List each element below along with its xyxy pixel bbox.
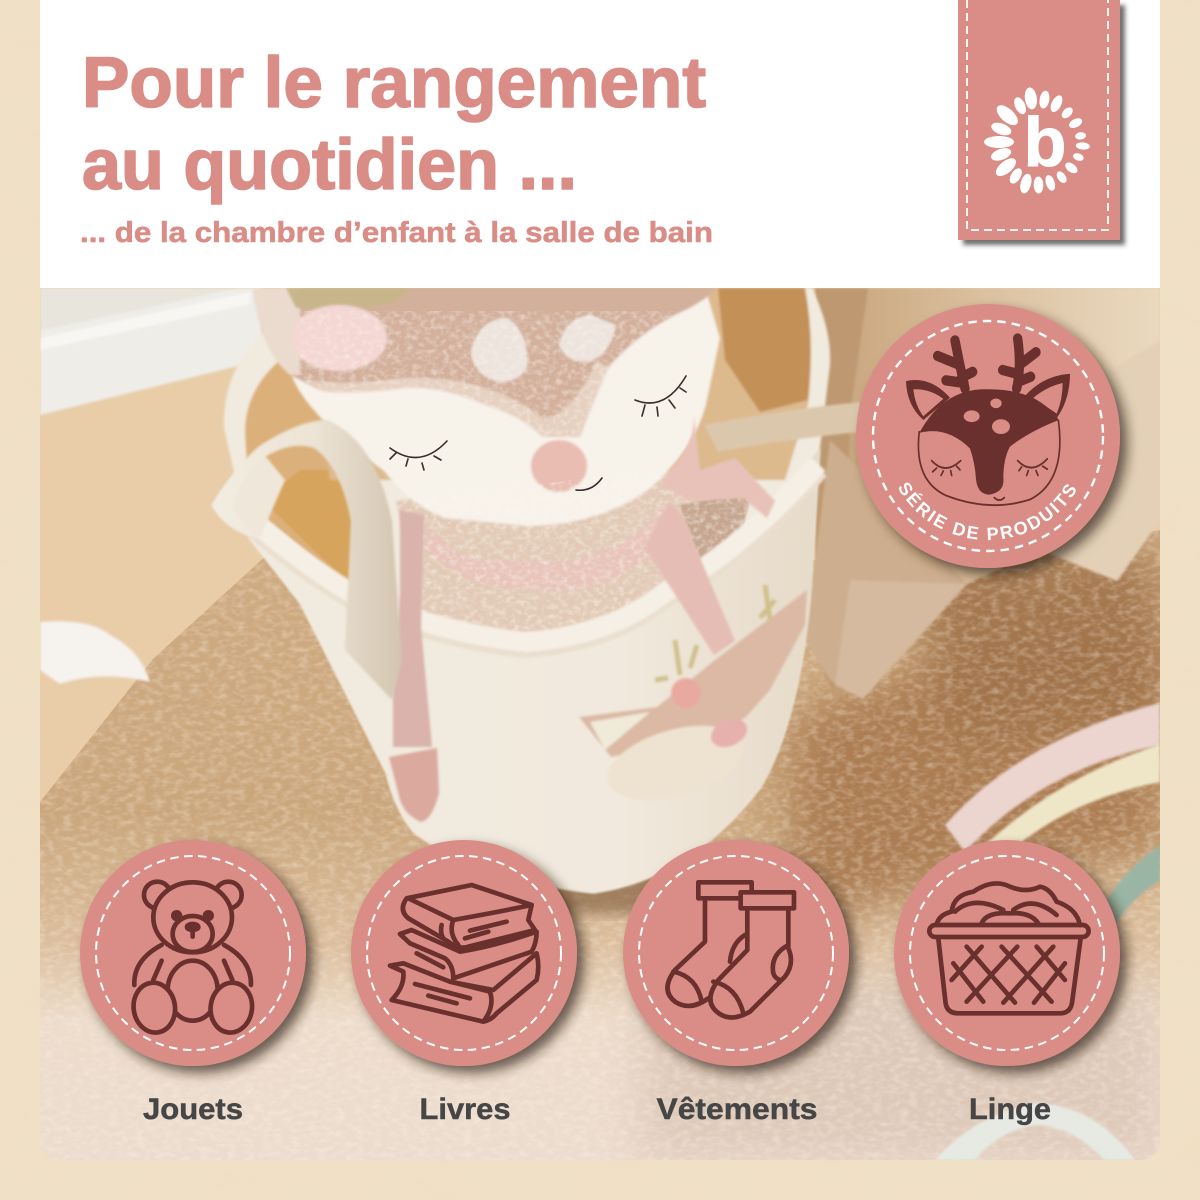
title <box>82 44 706 205</box>
logo: b <box>1024 103 1066 181</box>
flower <box>291 305 387 371</box>
photo: basket with plush deer on a rug <box>40 288 1160 1160</box>
white ring toy <box>935 1103 1135 1160</box>
label: Linge <box>969 1093 1051 1126</box>
logo <box>984 87 1090 195</box>
strap fold <box>212 452 285 538</box>
category: livres <box>351 840 577 1126</box>
hood eye patches <box>471 315 616 382</box>
tassel <box>40 621 150 684</box>
category: jouets <box>80 840 306 1126</box>
face outline <box>918 420 1060 505</box>
header panel <box>40 0 1160 288</box>
label: Vêtements <box>656 1093 818 1126</box>
appliqué deer on basket <box>579 590 807 757</box>
subtitle: ... de la chambre d’enfant à la salle de bain <box>80 217 713 249</box>
plush deer <box>253 288 752 640</box>
plush head <box>290 290 720 526</box>
wall and skirting <box>40 288 262 415</box>
label: Jouets <box>143 1093 243 1126</box>
basket front <box>245 448 820 893</box>
fur texture on hood <box>300 311 676 437</box>
face mask <box>919 389 1059 495</box>
floral leg <box>389 510 439 822</box>
fur texture on body <box>398 476 748 631</box>
ears <box>906 380 950 420</box>
basket <box>224 288 830 893</box>
category: vêtements <box>623 840 849 1126</box>
icon: stack of books <box>390 885 538 1022</box>
round jute rug <box>40 530 1160 1160</box>
headband <box>286 288 412 311</box>
plush hood <box>292 288 714 421</box>
antlers <box>938 339 1036 388</box>
brand tag <box>958 0 1120 240</box>
rope handle <box>704 402 860 452</box>
icon: laundry basket <box>929 883 1089 1013</box>
title: au quotidien ... <box>82 126 577 205</box>
basket back and silhouette <box>224 288 830 893</box>
icon: socks <box>667 882 794 1017</box>
wooden toy arcs <box>945 703 1160 925</box>
label: Livres <box>420 1093 510 1126</box>
foot <box>389 748 439 822</box>
scarf ties <box>645 415 775 655</box>
linen and cushion behind basket <box>805 288 1160 700</box>
closed eyes and smile <box>390 376 686 490</box>
category: linge <box>894 840 1120 1126</box>
basket strap <box>212 420 402 700</box>
plush body <box>396 471 704 633</box>
eyes <box>932 459 1047 500</box>
basket interior <box>244 361 352 578</box>
basket shadow <box>556 876 653 920</box>
title: Pour le rangement <box>82 44 706 123</box>
badge: série de produits <box>854 302 1136 584</box>
badge label: SÉRIE DE PRODUITS <box>899 482 1076 540</box>
icon: teddy bear <box>130 882 255 1035</box>
plush scarf <box>425 508 680 590</box>
plush nose <box>531 440 587 492</box>
icon: deer <box>906 339 1070 505</box>
floor <box>40 288 1160 802</box>
spots <box>964 410 980 422</box>
